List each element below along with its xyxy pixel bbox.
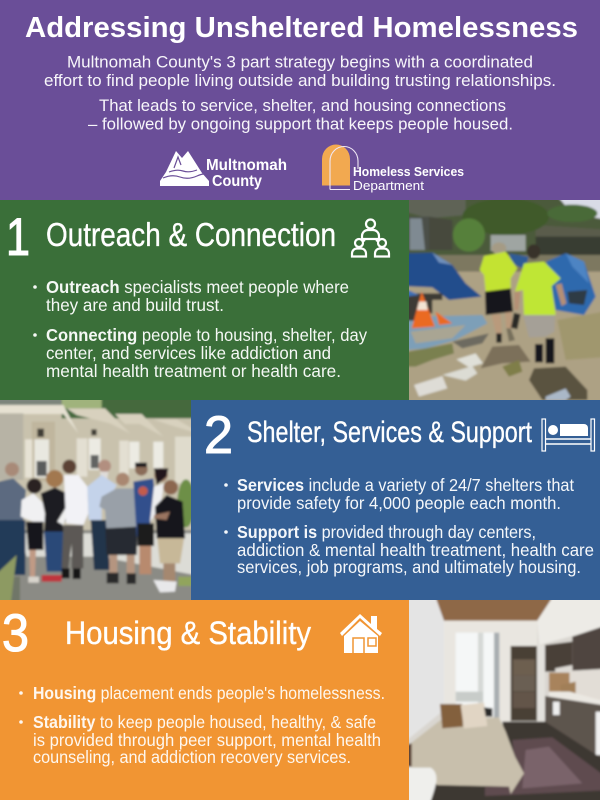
bullet list: outreach: they are and build trust.: [46, 295, 224, 315]
bullet list: housing: Stability to keep people housed, healthy, & safe: [33, 712, 376, 732]
logo: Multnomah County: County: [212, 173, 262, 190]
panel: shelter, services and support: [191, 400, 600, 600]
number 1: 1: [6, 208, 30, 267]
title: Addressing Unsheltered Homelessness: [25, 12, 578, 44]
icon: house: [340, 614, 382, 653]
number 2: 2: [204, 406, 233, 465]
intro paragraph 1: Multnomah County's 3 part strategy begins with a coordinated: [67, 54, 533, 72]
bullet list: services: [224, 475, 594, 577]
heading: Outreach & Connection: [46, 216, 336, 253]
photo: furnished studio apartment: [409, 600, 600, 800]
bullet list: services: provide safety for 4,000 people each month.: [237, 493, 561, 513]
intro paragraph 1: effort to find people living outside and building trusting relationships.: [44, 72, 556, 90]
heading: Housing & Stability: [65, 615, 311, 651]
photo: shelter staff group in front of pods: [0, 400, 191, 600]
person right: [527, 244, 540, 259]
bullet list: outreach: [33, 277, 367, 381]
panel: header: [0, 0, 600, 200]
logo: Homeless Services Department: [322, 144, 464, 193]
intro paragraph 2: That leads to service, shelter, and housing connections: [99, 97, 506, 115]
logo: Homeless Services Department: Department: [353, 179, 425, 193]
person left: [492, 242, 506, 254]
icon: bed: [542, 419, 594, 451]
logo: Homeless Services Department: Homeless Services: [353, 165, 464, 179]
bullet list: services: Support is provided through day centers,: [237, 522, 536, 542]
bullet list: outreach: Connecting people to housing, shelter, day: [46, 325, 367, 345]
bullet list: outreach: mental health treatment or health care.: [46, 361, 341, 381]
bullet list: services: Services include a variety of 24/7 shelters that: [237, 475, 574, 495]
bullet list: outreach: center, and services like addiction and: [46, 343, 331, 363]
photo: outreach workers walking past tents: [409, 200, 600, 400]
bullet list: outreach: Outreach specialists meet people where: [46, 277, 349, 297]
bullet list: services: addiction & mental health treatment, health care: [237, 540, 594, 560]
bullet list: housing: Housing placement ends people's homelessness.: [33, 683, 385, 703]
intro paragraph 2: – followed by ongoing support that keeps people housed.: [88, 116, 513, 134]
intro paragraph 1: [44, 54, 556, 90]
panel: outreach and connection: [0, 200, 409, 400]
bullet list: housing: is provided through peer support, mental health: [33, 730, 381, 750]
bullet list: housing: [19, 683, 385, 767]
panel: housing and stability: [0, 600, 409, 800]
people: [5, 462, 19, 476]
icon: network of people: [352, 220, 389, 256]
number 3: 3: [2, 604, 29, 663]
logo: Multnomah County: [160, 151, 287, 190]
bullet list: services: services, job programs, and ultimately housing.: [237, 557, 581, 577]
logo: Multnomah County: Multnomah: [206, 157, 287, 174]
intro paragraph 2: [88, 97, 513, 134]
bullet list: housing: counseling, and addiction recovery services.: [33, 747, 351, 767]
